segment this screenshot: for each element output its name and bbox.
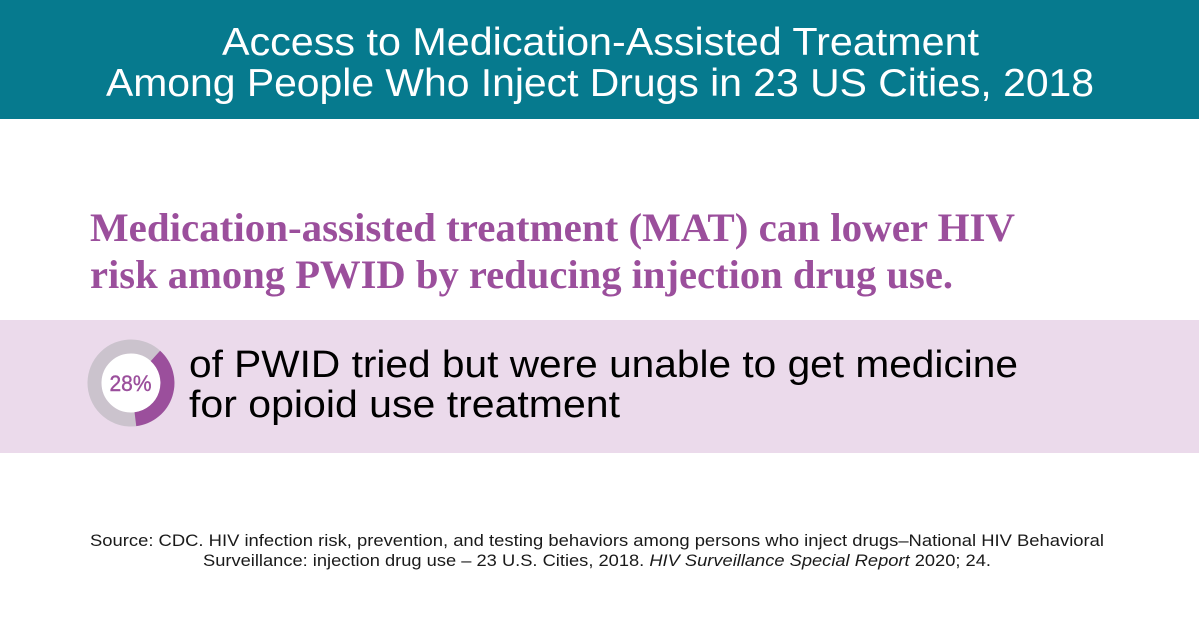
statistic text: for opioid use treatment xyxy=(189,384,620,426)
source citation: Source: CDC. HIV infection risk, prevention, and testing behaviors among persons who inject drugs–National HIV Behavioral xyxy=(90,531,1104,550)
title: Among People Who Inject Drugs in 23 US Cities, 2018 xyxy=(106,62,1094,105)
panel: statistic band xyxy=(0,320,1199,453)
donut chart: 28%: 28% xyxy=(110,371,152,396)
donut chart: 28% xyxy=(94,346,168,420)
source citation: Surveillance: injection drug use – 23 U.S. Cities, 2018. HIV Surveillance Special Report 2020; 24. xyxy=(203,551,991,570)
source citation xyxy=(90,531,1104,570)
heading: MAT statement: risk among PWID by reducing injection drug use. xyxy=(90,252,953,297)
statistic text xyxy=(189,344,1018,426)
header banner xyxy=(0,0,1199,119)
title: Access to Medication-Assisted Treatment xyxy=(222,21,979,64)
heading: MAT statement: Medication-assisted treatment (MAT) can lower HIV xyxy=(90,205,1015,250)
title xyxy=(106,21,1094,105)
heading: MAT statement xyxy=(90,205,1015,297)
statistic text: of PWID tried but were unable to get medicine xyxy=(189,344,1018,386)
